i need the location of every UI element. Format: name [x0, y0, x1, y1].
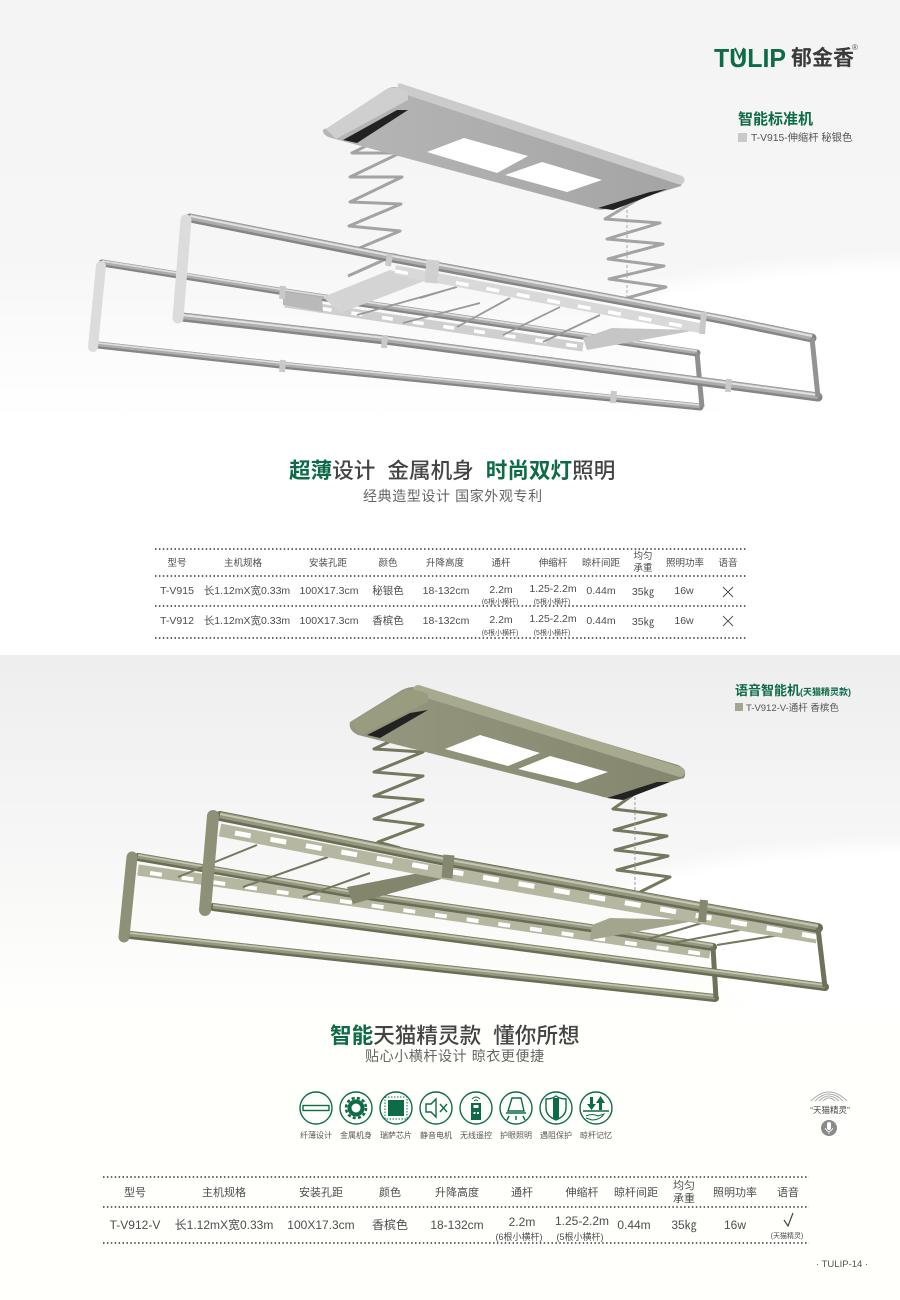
model label: voice: T-V912-V-通杆 香槟色	[746, 702, 839, 714]
table row: T-V912-V: 1.25-2.2m	[555, 1214, 609, 1228]
table header: 通杆	[511, 1185, 533, 1199]
table row: T-V915: 秘银色	[372, 584, 404, 597]
table row: T-V915: 长1.12mX宽0.33m	[204, 584, 290, 597]
table header: 升降高度	[426, 557, 464, 569]
table header: 主机规格	[224, 557, 262, 569]
subheading: silver model: 经典造型设计 国家外观专利	[363, 488, 543, 504]
icon: shield	[540, 1092, 572, 1140]
logo: ®	[852, 43, 858, 52]
table row: T-V915: 18-132cm	[423, 585, 470, 597]
icon: slim design	[300, 1092, 332, 1140]
table header: 型号	[124, 1185, 146, 1199]
table header: 型号	[167, 558, 187, 569]
icon: rod memory: 晾杆记忆	[580, 1130, 612, 1140]
table header	[167, 550, 738, 574]
icon: rod memory	[580, 1092, 612, 1140]
table header: 照明功率	[713, 1185, 757, 1199]
icon: silent motor: 静音电机	[420, 1130, 452, 1140]
model label: voice: 语音智能机(天猫精灵款)	[735, 683, 851, 698]
model label: standard: 智能标准机	[738, 110, 813, 128]
table row: T-V912-V: 16w	[724, 1218, 746, 1232]
table row: T-V912: (5根小横杆)	[534, 628, 570, 637]
table header: 伸缩杆	[566, 1185, 598, 1199]
table header: 承重	[633, 562, 653, 574]
back rack rails	[93, 261, 702, 407]
table row: T-V912-V: 100X17.3cm	[287, 1218, 355, 1232]
table row: T-V912	[160, 613, 733, 637]
icon: metal body: 金属机身	[340, 1130, 372, 1140]
table row: T-V912-V	[110, 1213, 803, 1242]
back perforated bar	[285, 303, 583, 347]
table row: T-V912-V: 2.2m	[509, 1215, 535, 1229]
logo: 郁金香	[791, 46, 854, 70]
table row: T-V912: 2.2m	[489, 614, 513, 626]
icon: chip: 瑞萨芯片	[380, 1130, 412, 1140]
icon: metal body	[340, 1092, 372, 1140]
heading: olive model: 智能天猫精灵款 懂你所想	[330, 1023, 580, 1048]
table header: 伸缩杆	[539, 557, 568, 569]
cross bars	[357, 287, 600, 342]
table: voice model	[103, 1177, 809, 1243]
table row: T-V912: 16w	[674, 615, 694, 627]
table row: T-V912: 100X17.3cm	[300, 615, 359, 627]
right scissor lift	[605, 192, 666, 300]
table header: 承重	[673, 1191, 695, 1205]
table row: T-V912-V: (6根小横杆)	[496, 1231, 543, 1242]
table row: T-V912: 35㎏	[632, 616, 655, 628]
icon: slim design: 纤薄设计	[300, 1130, 332, 1140]
table row: T-V912-V: 长1.12mX宽0.33m	[175, 1217, 273, 1232]
subheading: olive model: 贴心小横杆设计 晾衣更便捷	[365, 1048, 545, 1064]
table header: 晾杆间距	[614, 1185, 658, 1199]
table header: 颜色	[379, 1185, 401, 1199]
icon: shield: 遇阻保护	[540, 1130, 572, 1140]
icon: Tmall Genie voice	[810, 1092, 850, 1136]
table row: T-V912-V: 0.44m	[617, 1218, 651, 1232]
model label: voice	[735, 683, 851, 714]
icon: remote control: 无线遥控	[460, 1130, 492, 1140]
table row: T-V912-V: 35㎏	[671, 1218, 697, 1232]
model label: standard	[738, 110, 852, 144]
table row: T-V912-V: (5根小横杆)	[556, 1231, 604, 1242]
model label: standard: T-V915-伸缩杆 秘银色	[751, 131, 852, 144]
left scissor lift	[374, 727, 423, 848]
left scissor lift	[348, 128, 402, 276]
table row: T-V915: 16w	[674, 585, 694, 597]
icon: eye-care light: 护眼照明	[500, 1130, 532, 1140]
table header: 语音	[718, 557, 738, 569]
table row: T-V912: 长1.12mX宽0.33m	[204, 614, 290, 627]
panel background: olive model	[0, 655, 900, 1300]
ceiling unit	[350, 687, 685, 800]
table header: 安装孔距	[299, 1185, 343, 1199]
table header: 照明功率	[666, 557, 704, 569]
logo: TULIP	[714, 43, 786, 73]
icon: chip	[380, 1092, 412, 1140]
product: silver drying rack	[93, 85, 818, 407]
product: olive drying rack	[124, 687, 825, 998]
table: silver models	[155, 549, 747, 638]
table row: T-V912: 0.44m	[586, 615, 616, 627]
table row: T-V912: T-V912	[160, 615, 194, 627]
front rack rails	[205, 814, 825, 987]
table row: T-V915: (6根小横杆)	[482, 597, 518, 606]
logo	[714, 43, 858, 73]
table row: T-V915: 0.44m	[586, 585, 616, 597]
feature icons	[300, 1092, 612, 1140]
table row: T-V912: 1.25-2.2m	[529, 613, 577, 625]
table header: 主机规格	[202, 1185, 246, 1199]
brackets	[323, 270, 427, 313]
table header	[124, 1179, 799, 1205]
table row: T-V915: T-V915	[160, 585, 194, 597]
table header: 均匀	[673, 1179, 695, 1192]
front perforated bar	[395, 270, 700, 328]
table header: 颜色	[378, 557, 398, 569]
table row: T-V915: 100X17.3cm	[300, 585, 359, 597]
heading: silver model: 超薄设计 金属机身 时尚双灯照明	[289, 458, 615, 483]
table header: 均匀	[633, 550, 653, 562]
table row: T-V912-V: (天猫精灵)	[771, 1231, 803, 1240]
front rack rails	[178, 216, 818, 403]
ceiling unit	[323, 85, 682, 210]
table row: T-V915	[160, 583, 733, 606]
table row: T-V912: 18-132cm	[423, 615, 470, 627]
table header: 升降高度	[435, 1185, 479, 1199]
table row: T-V915: (5根小横杆)	[534, 597, 570, 606]
table header: 语音	[777, 1185, 799, 1199]
front perforated bar	[220, 830, 817, 937]
table row: T-V915: 1.25-2.2m	[529, 583, 577, 595]
table row: T-V915: 2.2m	[489, 584, 513, 596]
table header: 安装孔距	[309, 557, 347, 569]
table row: T-V912: (6根小横杆)	[482, 628, 518, 637]
table row: T-V912-V: 香槟色	[372, 1217, 408, 1232]
table header: 通杆	[491, 557, 511, 569]
brackets	[347, 868, 445, 904]
panel background: silver model	[0, 0, 900, 655]
page number: · TULIP-14 ·	[816, 1259, 868, 1270]
icon: silent motor	[420, 1092, 452, 1140]
icon: Tmall Genie voice: “天猫精灵”	[810, 1105, 850, 1115]
table row: T-V912: 香槟色	[372, 614, 404, 627]
table row: T-V912-V: T-V912-V	[110, 1218, 160, 1232]
table header: 晾杆间距	[582, 557, 620, 569]
icon: eye-care light	[500, 1092, 532, 1140]
table row: T-V912-V: 18-132cm	[430, 1218, 484, 1232]
back rack rails	[124, 855, 716, 998]
icon: remote control	[460, 1092, 492, 1140]
cross bars	[178, 845, 780, 945]
right scissor lift	[613, 783, 670, 892]
table row: T-V915: 35㎏	[632, 586, 655, 598]
